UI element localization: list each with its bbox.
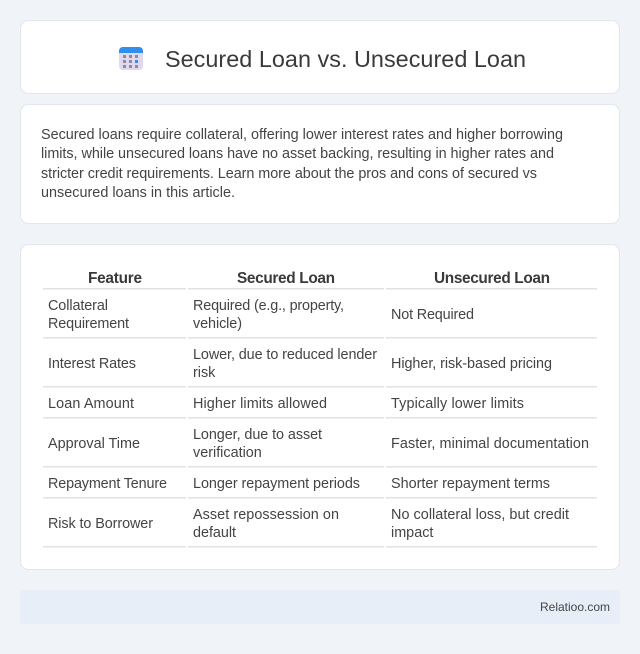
row: risk to borrower xyxy=(48,507,569,541)
row: collateral requirement: Not Required xyxy=(391,307,474,323)
row: repayment tenure: Shorter repayment terms xyxy=(391,476,550,492)
row: approval time: Longer, due to asset xyxy=(193,427,322,443)
row: approval time: Approval Time xyxy=(48,436,140,452)
row: collateral requirement: Collateral xyxy=(48,298,108,314)
row: risk to borrower: Risk to Borrower xyxy=(48,516,153,532)
row: risk to borrower: No collateral loss, but credit xyxy=(391,507,569,523)
row: collateral requirement xyxy=(48,298,474,332)
row: risk to borrower: impact xyxy=(391,525,433,541)
row: interest rates: Interest Rates xyxy=(48,356,136,372)
row: loan amount: Higher limits allowed xyxy=(193,396,327,412)
summary text xyxy=(41,127,563,201)
row: interest rates: Higher, risk-based pricing xyxy=(391,356,552,372)
row: approval time xyxy=(48,427,589,461)
row: loan amount: Loan Amount xyxy=(48,396,134,412)
row: interest rates: Lower, due to reduced lender xyxy=(193,347,377,363)
row: interest rates: risk xyxy=(193,365,216,381)
panel: summary xyxy=(20,104,620,224)
row: repayment tenure: Longer repayment periods xyxy=(193,476,360,492)
table header row xyxy=(88,270,550,287)
row: collateral requirement: vehicle) xyxy=(193,316,242,332)
row: approval time: verification xyxy=(193,445,262,461)
icon: calendar xyxy=(119,47,143,70)
table header row: Secured Loan xyxy=(237,270,335,287)
row: loan amount: Typically lower limits xyxy=(391,396,524,412)
row: collateral requirement: Requirement xyxy=(48,316,129,332)
panel: header xyxy=(20,20,620,94)
row: repayment tenure: Repayment Tenure xyxy=(48,476,167,492)
row: risk to borrower: default xyxy=(193,525,236,541)
row: risk to borrower: Asset repossession on xyxy=(193,507,339,523)
panel: comparison table xyxy=(20,244,620,570)
footer bar xyxy=(20,590,620,624)
summary text: unsecured loans in this article. xyxy=(41,185,235,201)
row: repayment tenure xyxy=(48,476,550,492)
summary text: Secured loans require collateral, offering lower interest rates and higher borrowing xyxy=(41,127,563,143)
title: Secured Loan vs. Unsecured Loan xyxy=(165,46,526,72)
row: approval time: Faster, minimal documentation xyxy=(391,436,589,452)
table header row: Feature xyxy=(88,270,142,287)
table header row: Unsecured Loan xyxy=(434,270,550,287)
summary text: stricter credit requirements. Learn more about the pros and cons of secured vs xyxy=(41,166,537,182)
row: loan amount xyxy=(48,396,524,412)
row: interest rates xyxy=(48,347,552,381)
footer credit: Relatioo.com xyxy=(540,600,610,614)
summary text: limits, while unsecured loans have no asset backing, resulting in higher rates and xyxy=(41,146,554,162)
row: collateral requirement: Required (e.g., property, xyxy=(193,298,344,314)
